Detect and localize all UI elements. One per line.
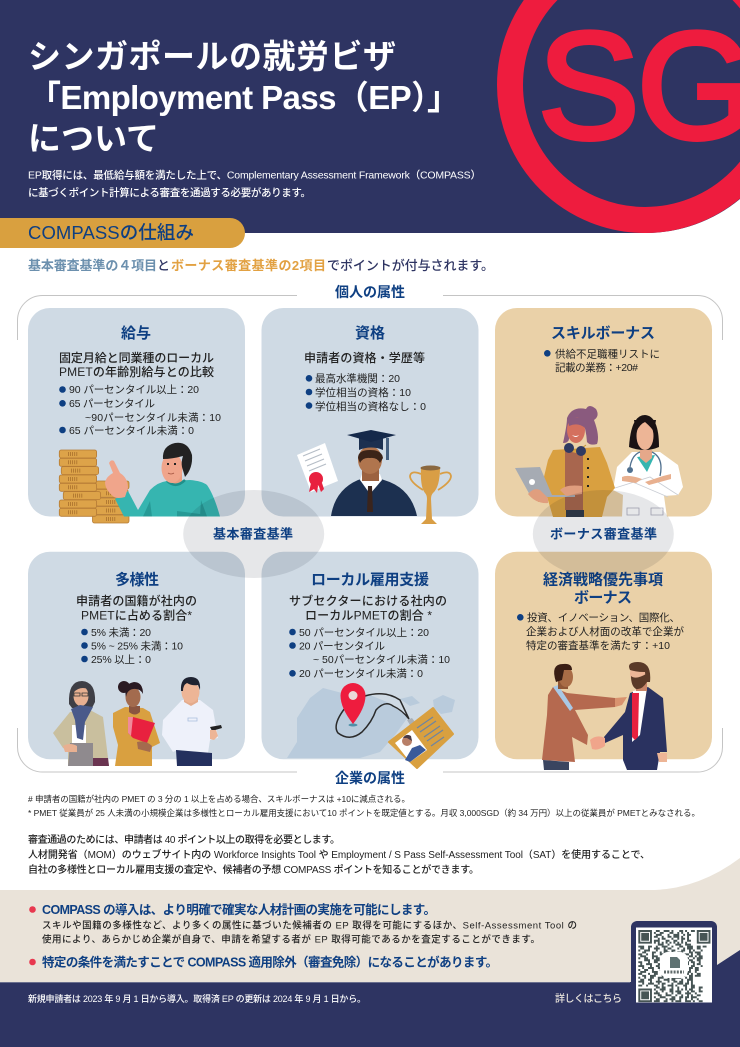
- panel: 給与: [28, 308, 245, 523]
- label ellipse: 基本審査基準: [183, 490, 324, 578]
- description: [59, 350, 214, 379]
- label ellipse: ボーナス審査基準: ボーナス審査基準: [550, 526, 657, 542]
- description: [289, 593, 447, 622]
- footnotes: * PMET 従業員が 25 人未満の小規模企業は多様性とローカル雇用支援において10 ポイントを既定値とする。月収 3,000SGD（約 34 万円）以上の従業員が PMETとみなされる。: [28, 808, 700, 818]
- criteria list: 65 パーセンタイル: [69, 398, 155, 410]
- intro text: に基づくポイント計算による審査を通過する必要があります。: [28, 186, 311, 199]
- requirement paragraph: 審査通過のためには、申請者は 40 ポイント以上の取得を必要とします。: [28, 833, 340, 846]
- benefits band: [0, 858, 740, 982]
- illustration: coins and man: [59, 443, 220, 523]
- criteria: 記載の業務：+20#: [555, 361, 638, 374]
- requirement paragraph: 人材開発省（MOM）のウェブサイト内の Workforce Insights Tool や Employment / S Pass Self-Assessment Tool（SAT）を使用することで、: [28, 848, 650, 861]
- criteria list: 学位相当の資格：10: [315, 386, 411, 399]
- criteria: [517, 611, 684, 652]
- benefit description: 使用により、あらかじめ企業が自身で、申請を希望する者が EP 取得可能であるかを査定することができます。: [42, 934, 540, 946]
- criteria: [544, 348, 660, 374]
- criteria list: [289, 627, 450, 680]
- panel: 多様性: [28, 552, 245, 766]
- footer band: [0, 950, 740, 1047]
- section heading: COMPASSの仕組み: [0, 218, 245, 248]
- criteria list: 最高水準機関：20: [315, 372, 400, 385]
- criteria: 特定の審査基準を満たす：+10: [526, 639, 670, 652]
- label ellipse: 基本審査基準: 基本審査基準: [213, 526, 293, 542]
- heading: 資格: [355, 324, 385, 342]
- heading: 経済戦略優先事項: [543, 570, 663, 588]
- intro text: [28, 168, 481, 199]
- header band: [0, 0, 740, 233]
- lead sentence: 基本審査基準の４項目: [28, 258, 157, 273]
- heading: [543, 570, 663, 606]
- benefit description: [42, 920, 577, 946]
- criteria list: [81, 627, 183, 666]
- section heading: COMPASSの仕組み: COMPASSの仕組み: [28, 222, 194, 243]
- illustration: map, pin and ID card: [287, 683, 455, 768]
- QR code: [631, 921, 717, 1002]
- heading: 給与: [121, 324, 151, 342]
- label: 企業の属性: 企業の属性: [335, 770, 405, 786]
- footer note: 新規申請者は 2023 年 9 月 1 日から導入。取得済 EP の更新は 2024 年 9 月 1 日から。: [28, 993, 366, 1004]
- lead sentence: でポイントが付与されます。: [327, 258, 494, 273]
- criteria list: 50 パーセンタイル以上：20: [299, 627, 429, 639]
- criteria: 企業および人材面の改革で企業が: [526, 625, 684, 638]
- heading: ローカル雇用支援: [311, 572, 429, 588]
- criteria list: 5% 未満：20: [91, 627, 151, 639]
- logo: SG ring: S: [538, 1, 639, 171]
- criteria: 供給不足職種リストに: [555, 348, 660, 360]
- bullet heading: exemption: 特定の条件を満たすことで COMPASS 適用除外（審査免除）になることがあります。: [42, 954, 498, 970]
- illustration: handshake: [542, 662, 667, 770]
- benefit description: スキルや国籍の多様性など、より多くの属性に基づいた候補者の EP 取得を可能にするほか、Self-Assessment Tool の: [42, 920, 577, 932]
- heading: 多様性: [115, 570, 159, 588]
- criteria list: 65 パーセンタイル未満：0: [69, 425, 194, 437]
- criteria list: [306, 372, 426, 413]
- label: 個人の属性: 個人の属性: [335, 284, 405, 300]
- description: 申請者の国籍が社内の: [76, 593, 197, 608]
- criteria list: 20 パーセンタイル: [299, 640, 385, 652]
- panel: ローカル雇用支援: [262, 552, 478, 768]
- lead sentence: と: [157, 258, 170, 273]
- illustration: graduate: [297, 430, 451, 524]
- description: ローカルPMETの割合 *: [305, 608, 432, 622]
- criteria list: ~90パーセンタイル未満：10: [85, 412, 221, 424]
- criteria list: 90 パーセンタイル以上：20: [69, 384, 199, 396]
- illustration: three people: [53, 677, 222, 766]
- footnotes: [28, 794, 700, 818]
- footnotes: # 申請者の国籍が社内の PMET の 3 分の 1 以上を占める場合、スキルボーナスは +10に減点される。: [28, 794, 410, 804]
- illustration: engineer and doctor: [515, 406, 683, 517]
- requirement paragraph: [28, 833, 650, 876]
- requirement paragraph: 自社の多様性とローカル雇用支援の査定や、候補者の予想 COMPASS ポイントを知ることができます。: [28, 863, 479, 876]
- title: について: [28, 120, 159, 157]
- lead sentence: ボーナス審査基準の2項目: [171, 258, 326, 273]
- criteria list: 25% 以上：0: [91, 654, 151, 666]
- criteria list: 学位相当の資格なし：0: [315, 400, 426, 413]
- intro text: EP取得には、最低給与額を満たした上で、Complementary Assessment Framework（COMPASS）: [28, 168, 481, 182]
- description: 固定月給と同業種のローカル: [59, 350, 214, 365]
- logo: SG ring: [510, 0, 740, 220]
- lead sentence: [28, 258, 494, 273]
- description: サブセクターにおける社内の: [289, 593, 447, 608]
- criteria: 投資、イノベーション、国際化、: [527, 611, 680, 624]
- heading: ボーナス: [574, 590, 632, 606]
- QR centre logo: [660, 952, 688, 978]
- description: PMETに占める割合*: [81, 608, 192, 622]
- criteria list: 5% ~ 25% 未満：10: [91, 640, 183, 652]
- bullet heading: benefit: COMPASS の導入は、より明確で確実な人材計画の実施を可能にします。: [42, 902, 436, 917]
- criteria list: [59, 384, 221, 437]
- attribute frame: [18, 296, 722, 772]
- title: 「Employment Pass（EP）」: [28, 79, 460, 116]
- description: [76, 593, 197, 622]
- QR caption: 詳しくはこちら: [555, 992, 622, 1005]
- panel: 経済戦略優先事項ボーナス: [495, 552, 712, 770]
- criteria list: ~ 50パーセンタイル未満：10: [313, 654, 450, 666]
- heading: スキルボーナス: [551, 325, 655, 342]
- title: シンガポールの就労ビザ: [28, 38, 396, 75]
- description: 申請者の資格・学歴等: [304, 350, 425, 365]
- panel: スキルボーナス: [495, 308, 712, 517]
- panel: 資格: [262, 308, 478, 524]
- criteria list: 20 パーセンタイル未満：0: [299, 668, 423, 680]
- title: [28, 38, 460, 157]
- description: PMETの年齢別給与との比較: [59, 364, 214, 379]
- label ellipse: ボーナス審査基準: [533, 490, 674, 578]
